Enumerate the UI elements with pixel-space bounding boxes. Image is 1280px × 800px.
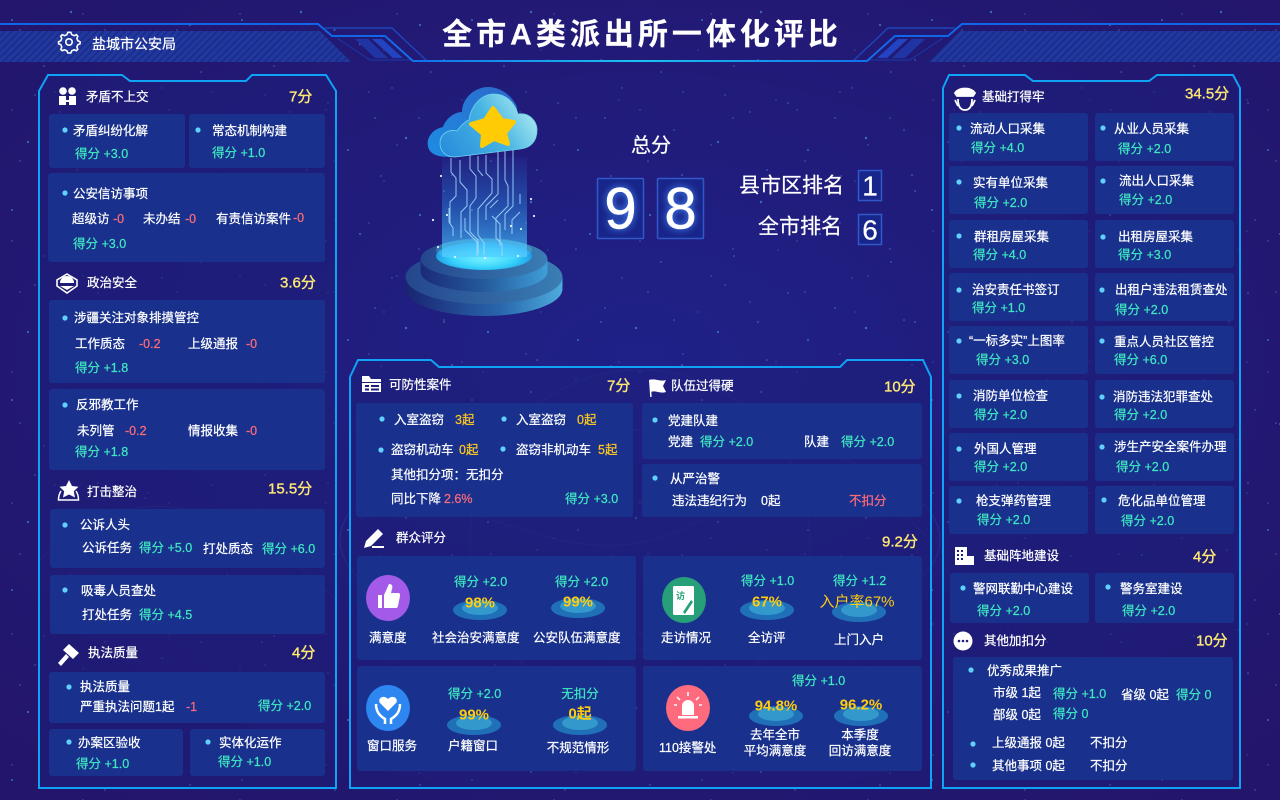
card: 涉疆关注对象排摸管控: 上级通报 — [188, 336, 239, 351]
card: 公安信访事项: -0 — [293, 211, 304, 225]
section: 政治安全 — [57, 274, 316, 293]
card: 外国人管理 — [949, 433, 1088, 481]
card: 流出人口采集: 流出人口采集 — [1119, 173, 1195, 188]
metric: 公安队伍满意度 — [533, 574, 621, 645]
metric: 上门入户: 得分 +1.2 — [833, 573, 886, 588]
card: 反邪教工作: -0 — [246, 424, 257, 438]
metric: 本季度回访满意度: 96.2% — [840, 696, 882, 714]
card: 可防性案件明细: 盗窃机动车 — [391, 442, 454, 457]
card: 实体化运作: 实体化运作 — [219, 735, 282, 750]
section: 执法质量 — [58, 644, 315, 666]
metric: 公安队伍满意度: 99% — [563, 594, 593, 610]
card: 枪支弹药管理 — [949, 486, 1088, 534]
metric: 不规范情形: 不规范情形 — [547, 740, 610, 755]
icon: alarm light — [666, 685, 710, 731]
card: 公安信访事项: 公安信访事项 — [73, 186, 148, 201]
card: 党建队建: 得分 +2.0 — [700, 434, 753, 449]
icon: pen — [364, 529, 384, 548]
card: 110接警处 — [643, 666, 922, 771]
metric: 社会治安满意度: 98% — [465, 594, 495, 612]
card: 治安责任书签订: 得分 +1.0 — [972, 300, 1025, 315]
card: 从严治警: 违法违纪行为 — [672, 494, 747, 508]
card: 从业人员采集: 从业人员采集 — [1114, 121, 1190, 136]
card: 党建队建: 得分 +2.0 — [841, 434, 894, 449]
card: 涉生产安全案件办理: 涉生产安全案件办理 — [1114, 439, 1227, 454]
metric: 社会治安满意度: 得分 +2.0 — [454, 574, 507, 589]
section: 基础阵地建设: 4分 — [1193, 548, 1216, 566]
card: 涉疆关注对象排摸管控: -0 — [246, 337, 257, 351]
card: 涉疆关注对象排摸管控: 得分 +1.8 — [75, 360, 128, 375]
section: 群众评分: 群众评分 — [396, 531, 446, 545]
section: 队伍过得硬: 10分 — [884, 378, 916, 396]
section: 其他加扣分: 其他加扣分 — [984, 634, 1047, 648]
section: 基础阵地建设 — [955, 547, 1216, 566]
card: 可防性案件明细: 同比下降 — [391, 492, 442, 506]
card: 优秀成果推广: 得分 0 — [1176, 687, 1211, 702]
card: 可防性案件明细: 2.6% — [444, 492, 472, 506]
total score label: 总分 — [631, 134, 671, 157]
metric: 社会治安满意度: 社会治安满意度 — [432, 630, 520, 645]
card: 执法质量: 得分 +2.0 — [258, 698, 311, 713]
card: 执法质量 — [49, 672, 325, 723]
card: 吸毒人员查处: 得分 +4.5 — [139, 607, 192, 622]
cloud back — [428, 87, 520, 157]
metric: 上门入户: 入户率67% — [819, 594, 895, 610]
card: 反邪教工作: 反邪教工作 — [76, 397, 139, 412]
card: 重点人员社区管控: 得分 +6.0 — [1114, 352, 1167, 367]
card: 可防性案件明细 — [356, 403, 633, 517]
card: 重点人员社区管控: 重点人员社区管控 — [1114, 334, 1215, 349]
card: 危化品单位管理: 危化品单位管理 — [1118, 493, 1206, 508]
card: 优秀成果推广: 市级 1起 — [993, 685, 1041, 700]
metric: 户籍窗口: 户籍窗口 — [448, 738, 498, 753]
card: 重点人员社区管控 — [1095, 326, 1234, 374]
org name with gear icon: 盐城市公安局 — [92, 36, 176, 52]
metric: 户籍窗口: 得分 +2.0 — [448, 686, 501, 701]
card: 党建队建: 党建 — [668, 434, 694, 449]
metric: 不规范情形 — [547, 687, 610, 755]
section: 基础打得牢 — [955, 86, 1229, 110]
section: 政治安全: 政治安全 — [87, 275, 138, 290]
card: 出租户违法租赁查处: 出租户违法租赁查处 — [1115, 282, 1228, 297]
card: 吸毒人员查处: 吸毒人员查处 — [81, 584, 157, 598]
card: 优秀成果推广: 优秀成果推广 — [987, 664, 1062, 678]
city rank: 6 — [862, 214, 878, 246]
card: 治安责任书签订 — [949, 273, 1088, 321]
card: 可防性案件明细: 3起 — [455, 413, 475, 427]
card: 公安信访事项 — [48, 173, 325, 262]
card: 警务室建设: 警务室建设 — [1120, 581, 1183, 596]
card: 可防性案件明细: 入室盗窃 — [516, 412, 566, 427]
metric: 户籍窗口 — [447, 686, 501, 753]
icon: buildings — [955, 547, 974, 565]
section: 矛盾不上交: 7分 — [289, 88, 312, 106]
metric: 全访评: 全访评 — [748, 630, 786, 645]
icon: shield dome — [57, 274, 77, 293]
card: 消防单位检查 — [949, 380, 1088, 428]
card: 矛盾纠纷化解: 矛盾纠纷化解 — [73, 124, 148, 138]
icon: thumb up — [366, 575, 410, 621]
card: 出租户违法租赁查处 — [1095, 273, 1234, 321]
section: 其他加扣分 — [954, 632, 1228, 650]
section: 基础打得牢: 基础打得牢 — [982, 89, 1045, 104]
platform base — [406, 239, 562, 316]
card: 实有单位采集: 得分 +2.0 — [974, 195, 1027, 210]
card: 可防性案件明细: 盗窃非机动车 — [516, 442, 591, 457]
card: 党建队建: 队建 — [804, 434, 830, 449]
card: 公诉人头: 公诉人头 — [80, 518, 130, 532]
panel frame — [39, 75, 336, 788]
card: 危化品单位管理 — [1095, 486, 1234, 534]
star icon — [471, 108, 514, 146]
card: 涉疆关注对象排摸管控: 工作质态 — [75, 337, 125, 351]
metric: 去年全市平均满意度: 94.8% — [755, 698, 797, 714]
card: 流出人口采集 — [1095, 166, 1234, 214]
section: 基础阵地建设: 基础阵地建设 — [984, 548, 1060, 563]
card: 外国人管理: 外国人管理 — [974, 441, 1037, 456]
card: 反邪教工作 — [49, 389, 325, 470]
card: 公安信访事项: 超级访 — [72, 211, 110, 226]
cloud front — [440, 94, 537, 157]
card: 满意度: 满意度 — [369, 630, 407, 645]
card: 公安信访事项: 未办结 — [143, 211, 181, 226]
card: 流出人口采集: 得分 +2.0 — [1119, 192, 1172, 207]
card: 公安信访事项: -0 — [185, 212, 196, 226]
sparkles — [432, 175, 535, 259]
panel frame — [943, 75, 1240, 788]
section: 可防性案件: 7分 — [607, 378, 630, 394]
metric: 社会治安满意度 — [432, 574, 520, 645]
card: 枪支弹药管理: 枪支弹药管理 — [976, 493, 1052, 508]
metric: 本季度回访满意度: 回访满意度 — [829, 743, 892, 758]
card: 吸毒人员查处: 打处任务 — [82, 607, 132, 622]
icon: visit note: 访 — [676, 590, 685, 601]
header band — [0, 24, 1280, 62]
metric: 全访评 — [740, 573, 794, 645]
card: 优秀成果推广: 部级 0起 — [993, 707, 1041, 722]
metric: 本季度回访满意度: 本季度 — [841, 727, 879, 742]
card: 优秀成果推广: 得分 0 — [1053, 706, 1088, 721]
card: 出租房屋采集: 出租房屋采集 — [1118, 229, 1194, 244]
icon: star on base — [58, 480, 78, 500]
card: 110接警处: 得分 +1.0 — [792, 673, 845, 688]
card: 窗口服务 — [357, 666, 636, 771]
card: 消防违法犯罪查处 — [1095, 380, 1234, 428]
metric: 全访评: 得分 +1.0 — [741, 573, 794, 588]
card: 吸毒人员查处 — [50, 575, 325, 634]
card: 消防违法犯罪查处: 得分 +2.0 — [1114, 407, 1167, 422]
card: 优秀成果推广: 省级 0起 — [1121, 688, 1169, 702]
metric: 户籍窗口: 99% — [459, 706, 489, 724]
card: 流动人口采集: 流动人口采集 — [970, 121, 1046, 136]
card: 从严治警: 0起 — [761, 494, 781, 508]
metric: 去年全市平均满意度 — [744, 698, 807, 758]
card: 警网联勤中心建设 — [950, 573, 1089, 623]
card: 公安信访事项: -0 — [113, 212, 124, 226]
icon: police cap — [955, 88, 975, 110]
metric: 全访评: 67% — [752, 594, 782, 610]
card: 可防性案件明细: 得分 +3.0 — [565, 491, 618, 506]
card: 涉疆关注对象排摸管控 — [49, 300, 325, 383]
card: 从严治警 — [642, 464, 922, 517]
card: 满意度 — [357, 556, 636, 660]
card: 办案区验收: 办案区验收 — [78, 735, 141, 750]
icon: flag — [649, 379, 666, 397]
card: 涉疆关注对象排摸管控: 涉疆关注对象排摸管控 — [74, 310, 200, 325]
card: 党建队建: 党建队建 — [668, 413, 719, 428]
icon: visit note — [662, 577, 706, 623]
card: 110接警处: 110接警处 — [659, 740, 717, 755]
score digit 9: 9 — [604, 176, 637, 242]
card: 涉生产安全案件办理 — [1095, 433, 1234, 481]
card: 涉生产安全案件办理: 得分 +2.0 — [1116, 459, 1169, 474]
illustration: cloud and star over glowing platform — [406, 87, 562, 316]
panel: right column — [943, 75, 1240, 788]
metric: 本季度回访满意度 — [829, 696, 892, 758]
card: 消防单位检查: 得分 +2.0 — [974, 407, 1027, 422]
card: 实体化运作: 得分 +1.0 — [218, 754, 271, 769]
icon: two people — [59, 87, 76, 105]
card: 涉疆关注对象排摸管控: -0.2 — [139, 337, 161, 351]
card: 优秀成果推广: 其他事项 0起 — [992, 759, 1065, 773]
card: 群租房屋采集: 得分 +4.0 — [973, 247, 1026, 262]
card: 常态机制构建 — [189, 114, 325, 168]
card: 优秀成果推广 — [953, 657, 1233, 780]
card: 群租房屋采集 — [949, 220, 1088, 268]
card: 反邪教工作: 未列管 — [77, 423, 115, 438]
card: 反邪教工作: 情报收集 — [188, 423, 239, 438]
card: 消防违法犯罪查处: 消防违法犯罪查处 — [1113, 389, 1214, 404]
card: 可防性案件明细: 5起 — [598, 443, 618, 457]
card: 执法质量: -1 — [186, 700, 197, 714]
icon: gear — [59, 32, 80, 53]
metric: 去年全市平均满意度: 去年全市 — [750, 727, 800, 742]
county rank — [739, 170, 882, 202]
card: 一标多实上图率: 得分 +3.0 — [976, 352, 1029, 367]
card: 警网联勤中心建设: 得分 +2.0 — [977, 603, 1030, 618]
card: 可防性案件明细: 入室盗窃 — [394, 412, 444, 427]
card: 公诉人头: 得分 +5.0 — [139, 540, 192, 555]
icon: more dots — [954, 632, 972, 650]
card: 常态机制构建: 常态机制构建 — [212, 123, 288, 138]
card: 实有单位采集: 实有单位采集 — [973, 175, 1049, 190]
section: 基础打得牢: 34.5分 — [1185, 86, 1229, 102]
card: 流动人口采集: 得分 +4.0 — [971, 140, 1024, 155]
card: 警网联勤中心建设: 警网联勤中心建设 — [973, 581, 1074, 596]
metric: 不规范情形: 0起 — [568, 706, 592, 722]
score digit 8: 8 — [664, 176, 697, 242]
card: 公诉人头 — [50, 509, 325, 568]
card: 优秀成果推广: 得分 +1.0 — [1053, 686, 1106, 701]
card: 执法质量: 严重执法问题1起 — [80, 699, 175, 714]
section: 群众评分: 9.2分 — [882, 534, 918, 550]
card: 外国人管理: 得分 +2.0 — [974, 459, 1027, 474]
card: 常态机制构建: 得分 +1.0 — [212, 145, 265, 160]
card: 办案区验收 — [49, 729, 183, 776]
metric: 公安队伍满意度: 得分 +2.0 — [555, 574, 608, 589]
card: 从业人员采集 — [1095, 113, 1234, 161]
section: 政治安全: 3.6分 — [280, 274, 316, 292]
card: 实有单位采集 — [949, 166, 1088, 214]
card: 一标多实上图率 — [949, 326, 1088, 374]
title: 全市A类派出所一体化评比 — [442, 18, 842, 52]
section: 执法质量: 4分 — [292, 644, 315, 662]
card: 可防性案件明细: 0起 — [459, 443, 479, 457]
section: 队伍过得硬 — [649, 378, 916, 397]
card: 从严治警: 不扣分 — [849, 494, 887, 508]
org name with gear icon — [59, 32, 176, 53]
card: 群租房屋采集: 群租房屋采集 — [974, 229, 1050, 244]
card: 优秀成果推广: 不扣分 — [1090, 736, 1128, 750]
section: 队伍过得硬: 队伍过得硬 — [671, 378, 734, 393]
section: 可防性案件 — [362, 376, 630, 394]
county rank: 县市区排名 — [739, 174, 844, 198]
card: 走访情况 — [643, 556, 922, 660]
icon: heart in hands — [366, 685, 410, 731]
section: 可防性案件: 可防性案件 — [389, 377, 452, 392]
card: 反邪教工作: -0.2 — [125, 424, 147, 438]
card: 公诉人头: 打处质态 — [203, 542, 253, 556]
card: 矛盾纠纷化解 — [49, 114, 185, 168]
section: 其他加扣分: 10分 — [1196, 632, 1228, 650]
circuit lines — [449, 150, 520, 256]
card: 流动人口采集 — [949, 113, 1088, 161]
card: 枪支弹药管理: 得分 +2.0 — [977, 512, 1030, 527]
panel frame — [350, 360, 931, 788]
card: 党建队建 — [642, 403, 922, 459]
card: 执法质量: 执法质量 — [80, 680, 130, 694]
card: 实体化运作 — [190, 729, 325, 776]
metric: 去年全市平均满意度: 平均满意度 — [744, 743, 807, 758]
card: 出租房屋采集 — [1095, 220, 1234, 268]
card: 警务室建设 — [1095, 573, 1234, 623]
metric: 不规范情形: 无扣分 — [561, 687, 599, 701]
section: 打击整治: 15.5分 — [268, 480, 312, 498]
icon: gavel — [58, 644, 79, 666]
county rank: 1 — [862, 170, 878, 202]
card: 优秀成果推广: 不扣分 — [1090, 759, 1128, 773]
metric: 公安队伍满意度: 公安队伍满意度 — [533, 630, 621, 645]
card: 走访情况: 走访情况 — [661, 631, 712, 645]
card: 办案区验收: 得分 +1.0 — [76, 756, 129, 771]
section: 矛盾不上交: 矛盾不上交 — [86, 89, 149, 104]
card: 窗口服务: 窗口服务 — [367, 738, 417, 753]
city rank: 全市排名 — [758, 216, 842, 238]
card: 公安信访事项: 有责信访案件 — [216, 211, 291, 226]
panel: center column — [350, 360, 931, 788]
card: 可防性案件明细: 其他扣分项：无扣分 — [391, 468, 504, 482]
card: 反邪教工作: 得分 +1.8 — [75, 444, 128, 459]
card: 公诉人头: 得分 +6.0 — [262, 541, 315, 556]
card: 优秀成果推广: 上级通报 0起 — [992, 735, 1065, 750]
icon: folder table — [362, 376, 381, 392]
metric: 上门入户: 上门入户 — [834, 632, 884, 647]
card: 矛盾纠纷化解: 得分 +3.0 — [75, 146, 128, 161]
section: 执法质量: 执法质量 — [88, 646, 138, 660]
card: 一标多实上图率: “一标多实”上图率 — [969, 333, 1065, 348]
card: 消防单位检查: 消防单位检查 — [973, 388, 1049, 403]
card: 从业人员采集: 得分 +2.0 — [1118, 141, 1171, 156]
card: 可防性案件明细: 0起 — [577, 413, 597, 427]
card: 公诉人头: 公诉任务 — [82, 540, 132, 555]
city rank — [758, 214, 882, 246]
card: 治安责任书签订: 治安责任书签订 — [972, 282, 1060, 297]
card: 危化品单位管理: 得分 +2.0 — [1121, 513, 1174, 528]
light column — [436, 157, 532, 262]
card: 出租房屋采集: 得分 +3.0 — [1118, 247, 1171, 262]
metric: 上门入户 — [819, 573, 895, 647]
card: 从严治警: 从严治警 — [670, 471, 720, 486]
section: 打击整治: 打击整治 — [87, 484, 137, 499]
card: 公安信访事项: 得分 +3.0 — [73, 236, 126, 251]
section: 群众评分 — [364, 529, 918, 550]
panel: left column — [39, 75, 336, 788]
card: 出租户违法租赁查处: 得分 +2.0 — [1115, 302, 1168, 317]
section: 打击整治 — [58, 480, 312, 500]
section: 矛盾不上交 — [59, 87, 312, 106]
card: 警务室建设: 得分 +2.0 — [1122, 603, 1175, 618]
